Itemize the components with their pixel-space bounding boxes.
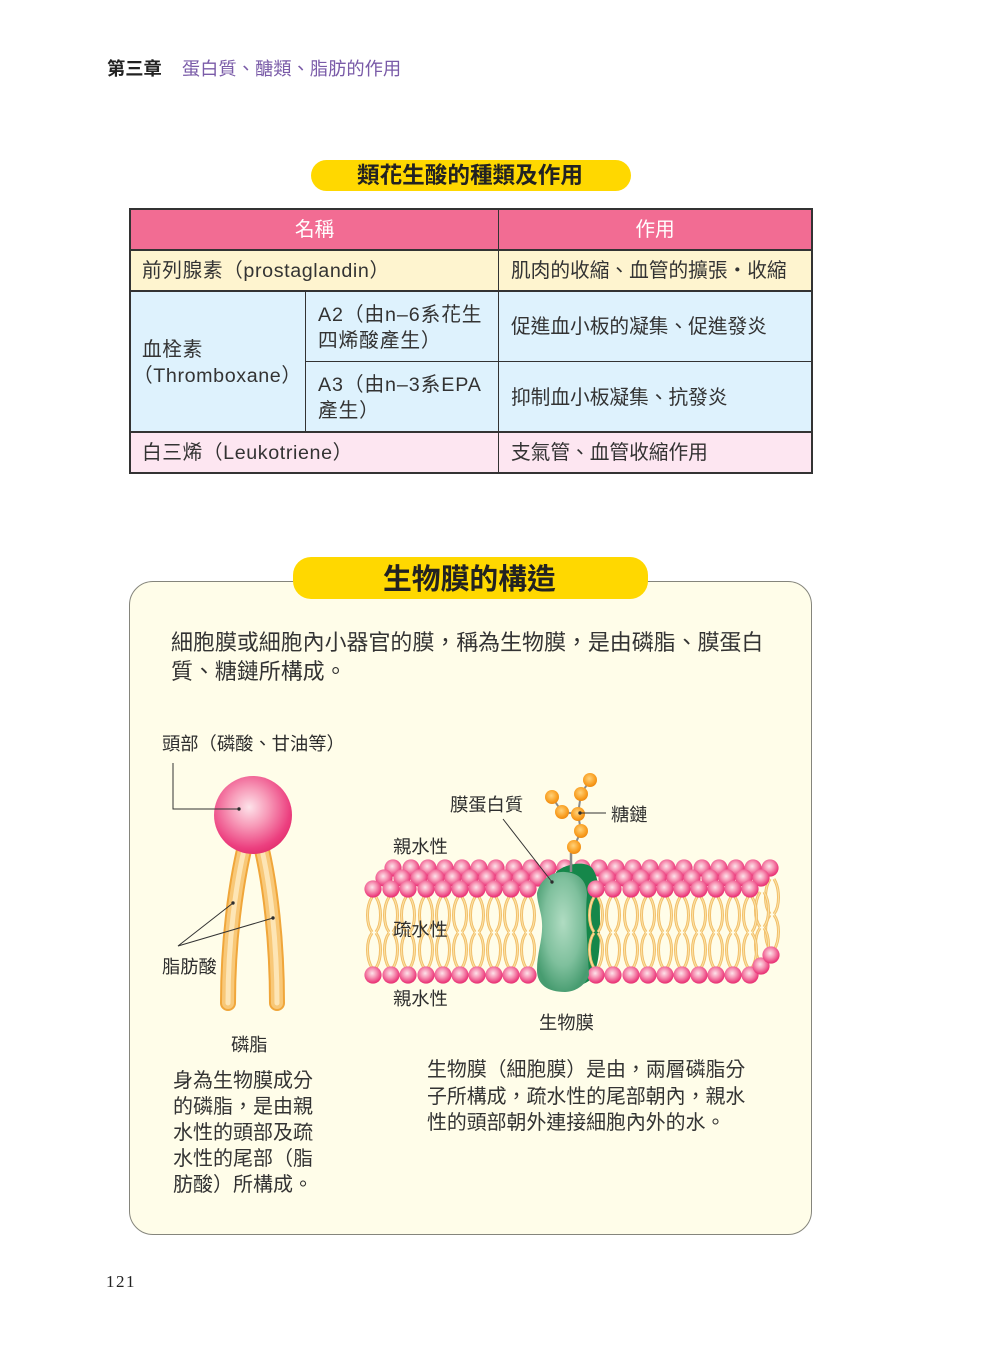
row: prostaglandin effect: 肌肉的收縮、血管的擴張‧收縮 (511, 260, 787, 282)
intro paragraph: 質、糖鏈所構成。 (171, 659, 347, 684)
text: phospholipid description: 的磷脂，是由親 (173, 1096, 313, 1118)
back row of heads (384, 859, 779, 877)
row: A3 effect (499, 362, 811, 431)
row: prostaglandin name (131, 251, 498, 290)
row: A3 name: 產生） (318, 400, 380, 422)
label: hydrophobic: 疏水性 (393, 919, 448, 940)
label: head: 頭部（磷酸、甘油等） (162, 733, 345, 754)
text: phospholipid description: 水性的尾部（脂 (173, 1148, 313, 1170)
label: sugar chain: 糖鏈 (611, 804, 648, 825)
sugar chain (545, 773, 597, 854)
row: A2 name: 四烯酸產生） (318, 330, 442, 352)
row: leukotriene name (131, 433, 498, 472)
row: A2 name (306, 292, 498, 361)
header cell: effect (499, 210, 811, 249)
bilayer membrane diagram (364, 773, 780, 1033)
label leader lines (173, 763, 274, 946)
leader lines (503, 812, 606, 883)
middle row of heads (375, 869, 770, 887)
row: prostaglandin name: 前列腺素（prostaglandin） (142, 260, 390, 282)
row: prostaglandin effect (499, 251, 811, 290)
table: eicosanoid types and effects (129, 208, 813, 474)
text: phospholipid description: 身為生物膜成分 (173, 1070, 313, 1092)
phospholipid diagram (162, 733, 345, 1055)
label: membrane protein: 膜蛋白質 (450, 794, 523, 815)
label: hydrophilic top: 親水性 (393, 836, 448, 857)
row: thromboxane name: （Thromboxane） (133, 365, 302, 387)
row: A2 effect (499, 292, 811, 361)
title pill: membrane structure (293, 557, 648, 599)
chapter heading: 第三章 蛋白質、醣類、脂肪的作用 (107, 58, 401, 79)
row: A3 name (306, 362, 498, 431)
stem of sugar chain (570, 853, 572, 872)
row: thromboxane name (131, 292, 305, 431)
label: biomembrane: 生物膜 (539, 1012, 594, 1033)
intro paragraph (171, 630, 763, 684)
tails (368, 897, 756, 968)
front row of heads (364, 880, 759, 898)
row: leukotriene name: 白三烯（Leukotriene） (142, 442, 353, 464)
end tails (756, 879, 778, 963)
title pill: membrane structure: 生物膜的構造 (383, 564, 556, 596)
row: A3 effect: 抑制血小板凝集、抗發炎 (511, 387, 728, 409)
header cell: name: 名稱 (295, 219, 334, 241)
text: membrane description: 生物膜（細胞膜）是由，兩層磷脂分 (427, 1059, 745, 1081)
text: membrane description (427, 1059, 745, 1134)
row: leukotriene effect (499, 433, 811, 472)
row: A2 name: A2（由n–6系花生 (318, 304, 482, 326)
header cell: effect: 作用 (635, 219, 675, 241)
row: A3 name: A3（由n–3系EPA (318, 374, 482, 396)
protein back (556, 864, 600, 985)
panel: biological membrane (129, 581, 812, 1235)
label: fatty acid: 脂肪酸 (162, 956, 217, 977)
text: membrane description: 性的頭部朝外連接細胞內外的水。 (427, 1112, 725, 1134)
text: phospholipid description (173, 1070, 313, 1196)
title pill: eicosanoids: 類花生酸的種類及作用 (357, 163, 583, 188)
row: thromboxane name: 血栓素 (142, 339, 203, 361)
text: phospholipid description: 水性的頭部及疏 (173, 1122, 313, 1144)
intro paragraph: 細胞膜或細胞內小器官的膜，稱為生物膜，是由磷脂、膜蛋白 (171, 630, 763, 655)
text: phospholipid description: 肪酸）所構成。 (173, 1174, 313, 1196)
membrane protein (537, 872, 589, 992)
header cell: name (131, 210, 498, 249)
text: membrane description: 子所構成，疏水性的尾部朝內，親水 (427, 1086, 745, 1108)
icon: phospholipid head (214, 776, 292, 854)
icon: fatty acid tails (228, 850, 277, 1003)
bottom row of heads (364, 946, 780, 984)
row: A2 effect: 促進血小板的凝集、促進發炎 (511, 316, 767, 338)
label: phospholipid: 磷脂 (231, 1034, 268, 1055)
title pill: eicosanoids (311, 160, 631, 191)
row: leukotriene effect: 支氣管、血管收縮作用 (511, 442, 708, 464)
page number: 121 (106, 1272, 136, 1291)
label: hydrophilic bottom: 親水性 (393, 988, 448, 1009)
